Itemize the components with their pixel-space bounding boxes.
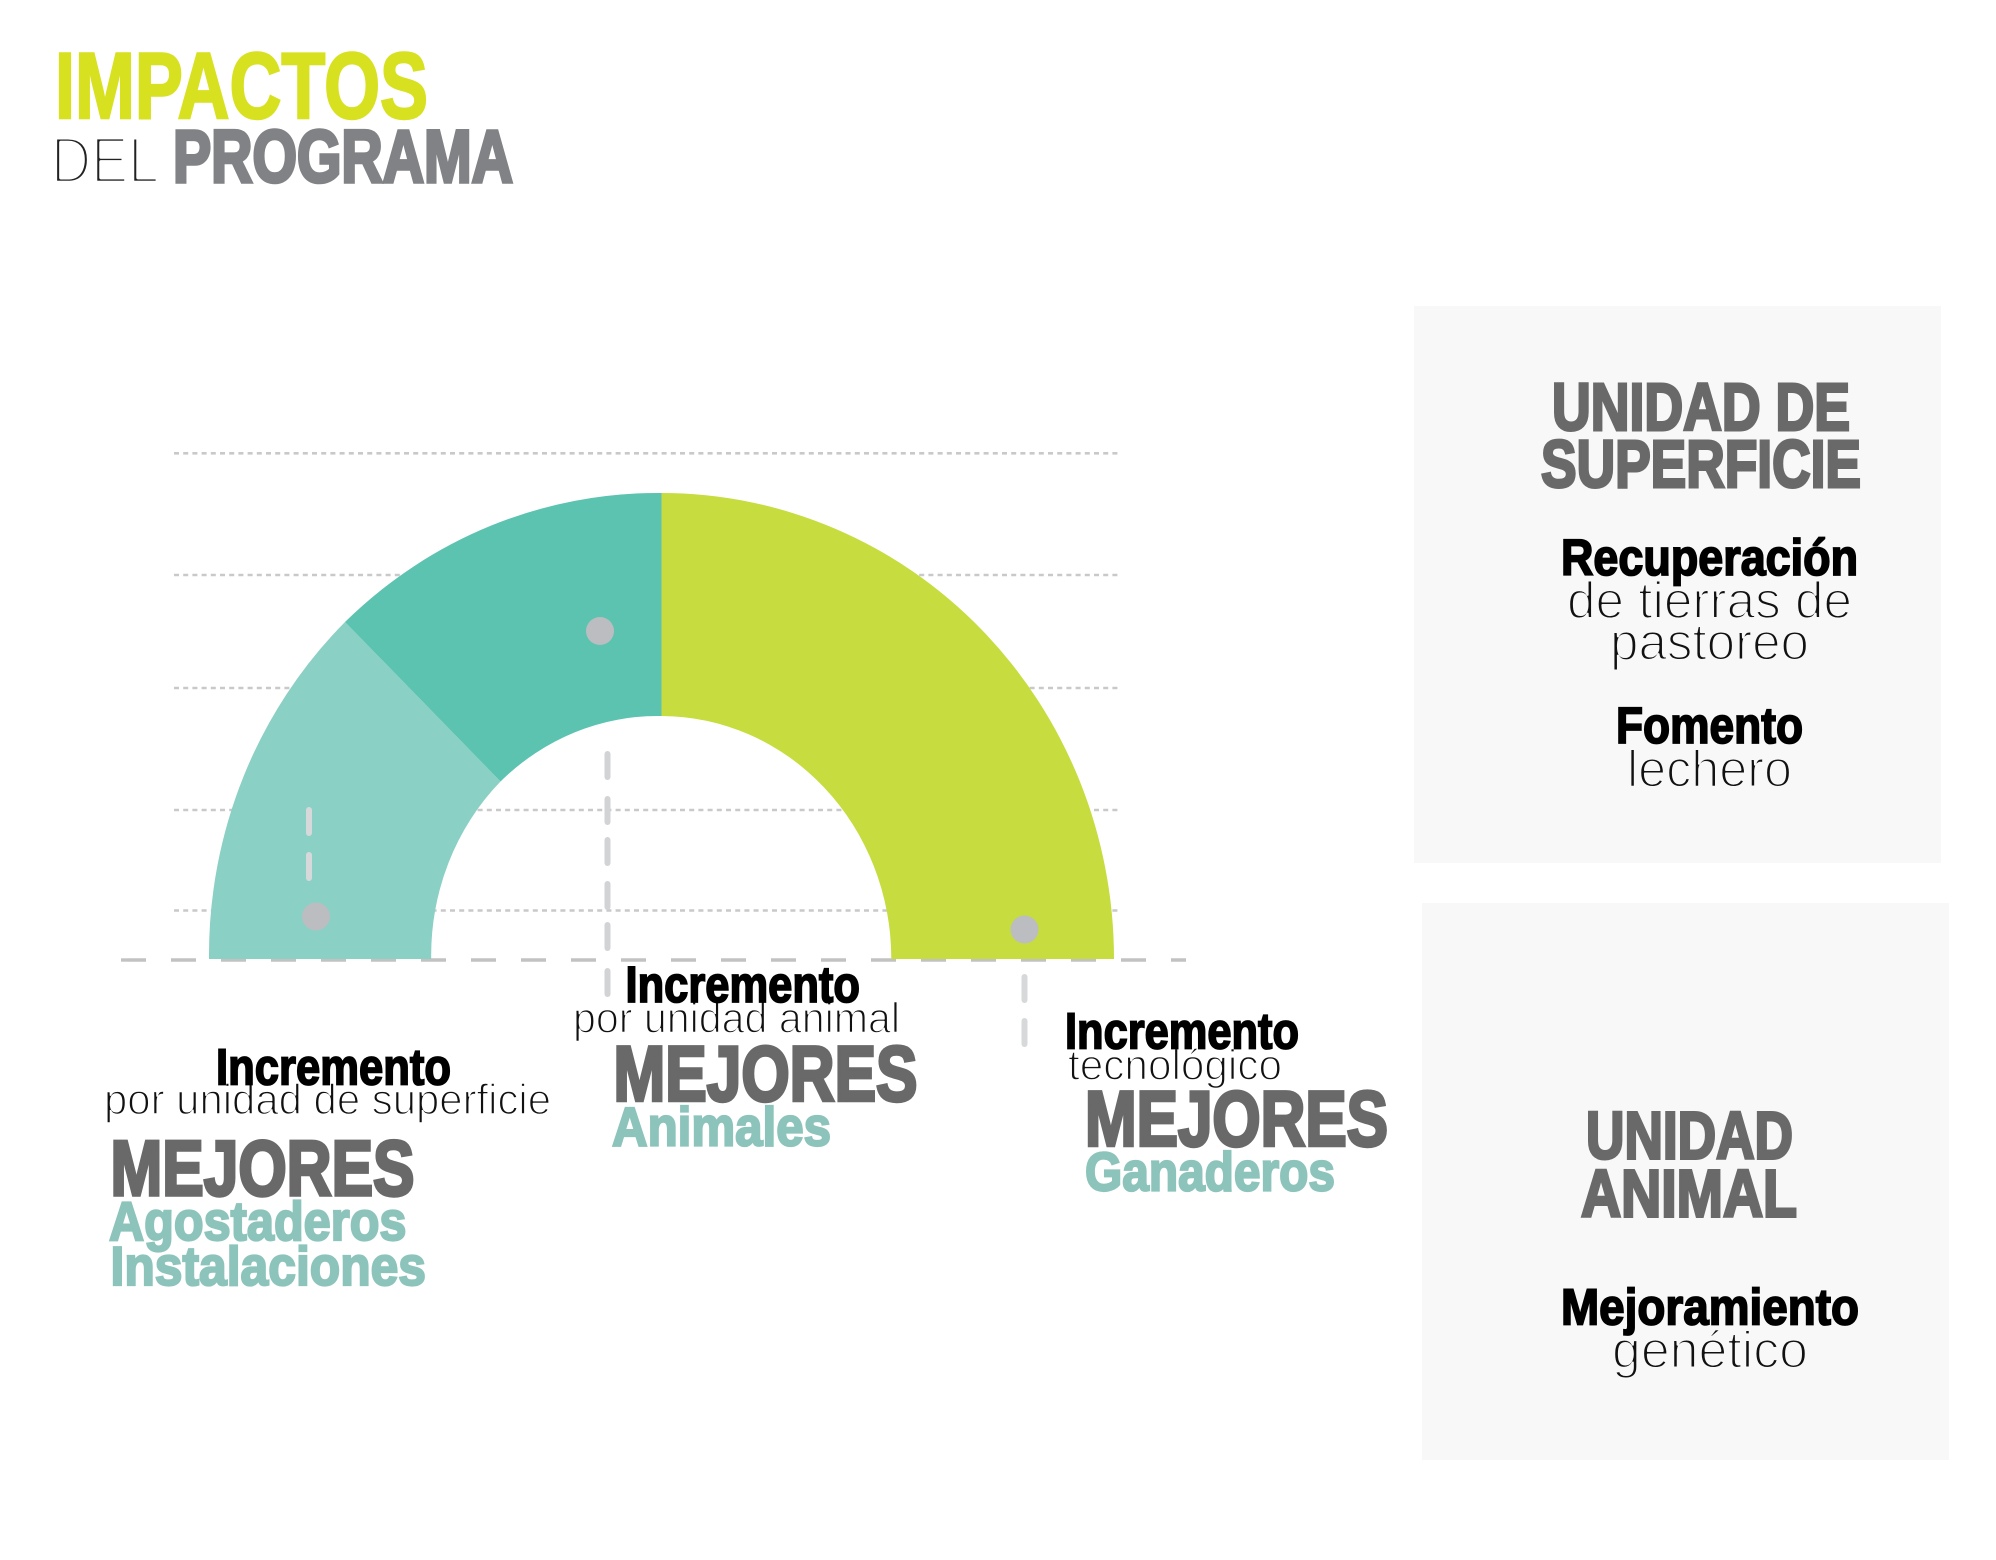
segment: mejores agostaderos — [209, 622, 500, 959]
leader: tecnológico — [1022, 977, 1028, 1044]
label block: center: Animales — [612, 1095, 831, 1157]
label block: left: Incremento — [216, 1038, 451, 1096]
panel: unidad de superficie — [1414, 306, 1941, 863]
label block: left: por unidad de superficie — [104, 1077, 551, 1124]
text block: mejoramiento genético: genético — [1612, 1322, 1808, 1380]
marker dot: ganaderos — [1010, 916, 1038, 944]
text block: mejoramiento genético: Mejoramiento — [1561, 1278, 1859, 1336]
label block: center — [573, 956, 918, 1157]
label block: left: MEJORES — [110, 1124, 414, 1212]
label block: center: por unidad animal — [573, 996, 900, 1043]
label block: center: MEJORES — [614, 1029, 918, 1117]
title word: DEL: DEL — [51, 124, 159, 196]
leader: superficie — [306, 810, 312, 878]
label block: right — [1065, 1002, 1388, 1202]
panel heading: unidad animal: UNIDAD — [1586, 1098, 1793, 1174]
title line: IMPACTOS: IMPACTOS — [55, 33, 428, 138]
segment: mejores ganaderos — [662, 493, 1114, 959]
text block: fomento lechero — [1616, 697, 1803, 798]
text block: fomento lechero: Fomento — [1616, 697, 1803, 754]
text block: recuperación de tierras de pastoreo: Recuperación — [1561, 529, 1858, 586]
label block: left: Instalaciones — [110, 1235, 426, 1297]
text block: fomento lechero: lechero — [1627, 740, 1792, 798]
label block: left — [104, 1038, 551, 1297]
label block: left: Agostaderos — [109, 1190, 406, 1252]
text block: recuperación de tierras de pastoreo — [1561, 529, 1858, 671]
label block: right: Incremento — [1065, 1002, 1299, 1060]
text block: recuperación de tierras de pastoreo: pastoreo — [1610, 613, 1809, 671]
label block: right: MEJORES — [1085, 1074, 1388, 1162]
panel heading: unidad animal: ANIMAL — [1581, 1156, 1797, 1232]
panel heading: unidad de superficie — [1541, 370, 1861, 502]
marker dot: animales — [586, 617, 614, 645]
panel: unidad animal — [1422, 903, 1949, 1460]
title — [51, 33, 513, 198]
title word: PROGRAMA: PROGRAMA — [173, 115, 513, 198]
segment: mejores animales — [345, 493, 662, 782]
marker dot: agostaderos — [302, 902, 330, 930]
text block: mejoramiento genético — [1561, 1278, 1859, 1380]
label block: right: tecnológico — [1068, 1042, 1282, 1089]
text block: recuperación de tierras de pastoreo: de tierras de — [1567, 572, 1852, 630]
panel heading: unidad de superficie: UNIDAD DE — [1552, 370, 1850, 445]
label block: center: Incremento — [626, 956, 860, 1013]
label block: right: Ganaderos — [1085, 1140, 1335, 1202]
leader: unidad animal — [604, 754, 610, 994]
panel heading: unidad animal — [1581, 1098, 1797, 1232]
semicircle chart — [209, 493, 1114, 959]
panel heading: unidad de superficie: SUPERFICIE — [1541, 427, 1861, 502]
